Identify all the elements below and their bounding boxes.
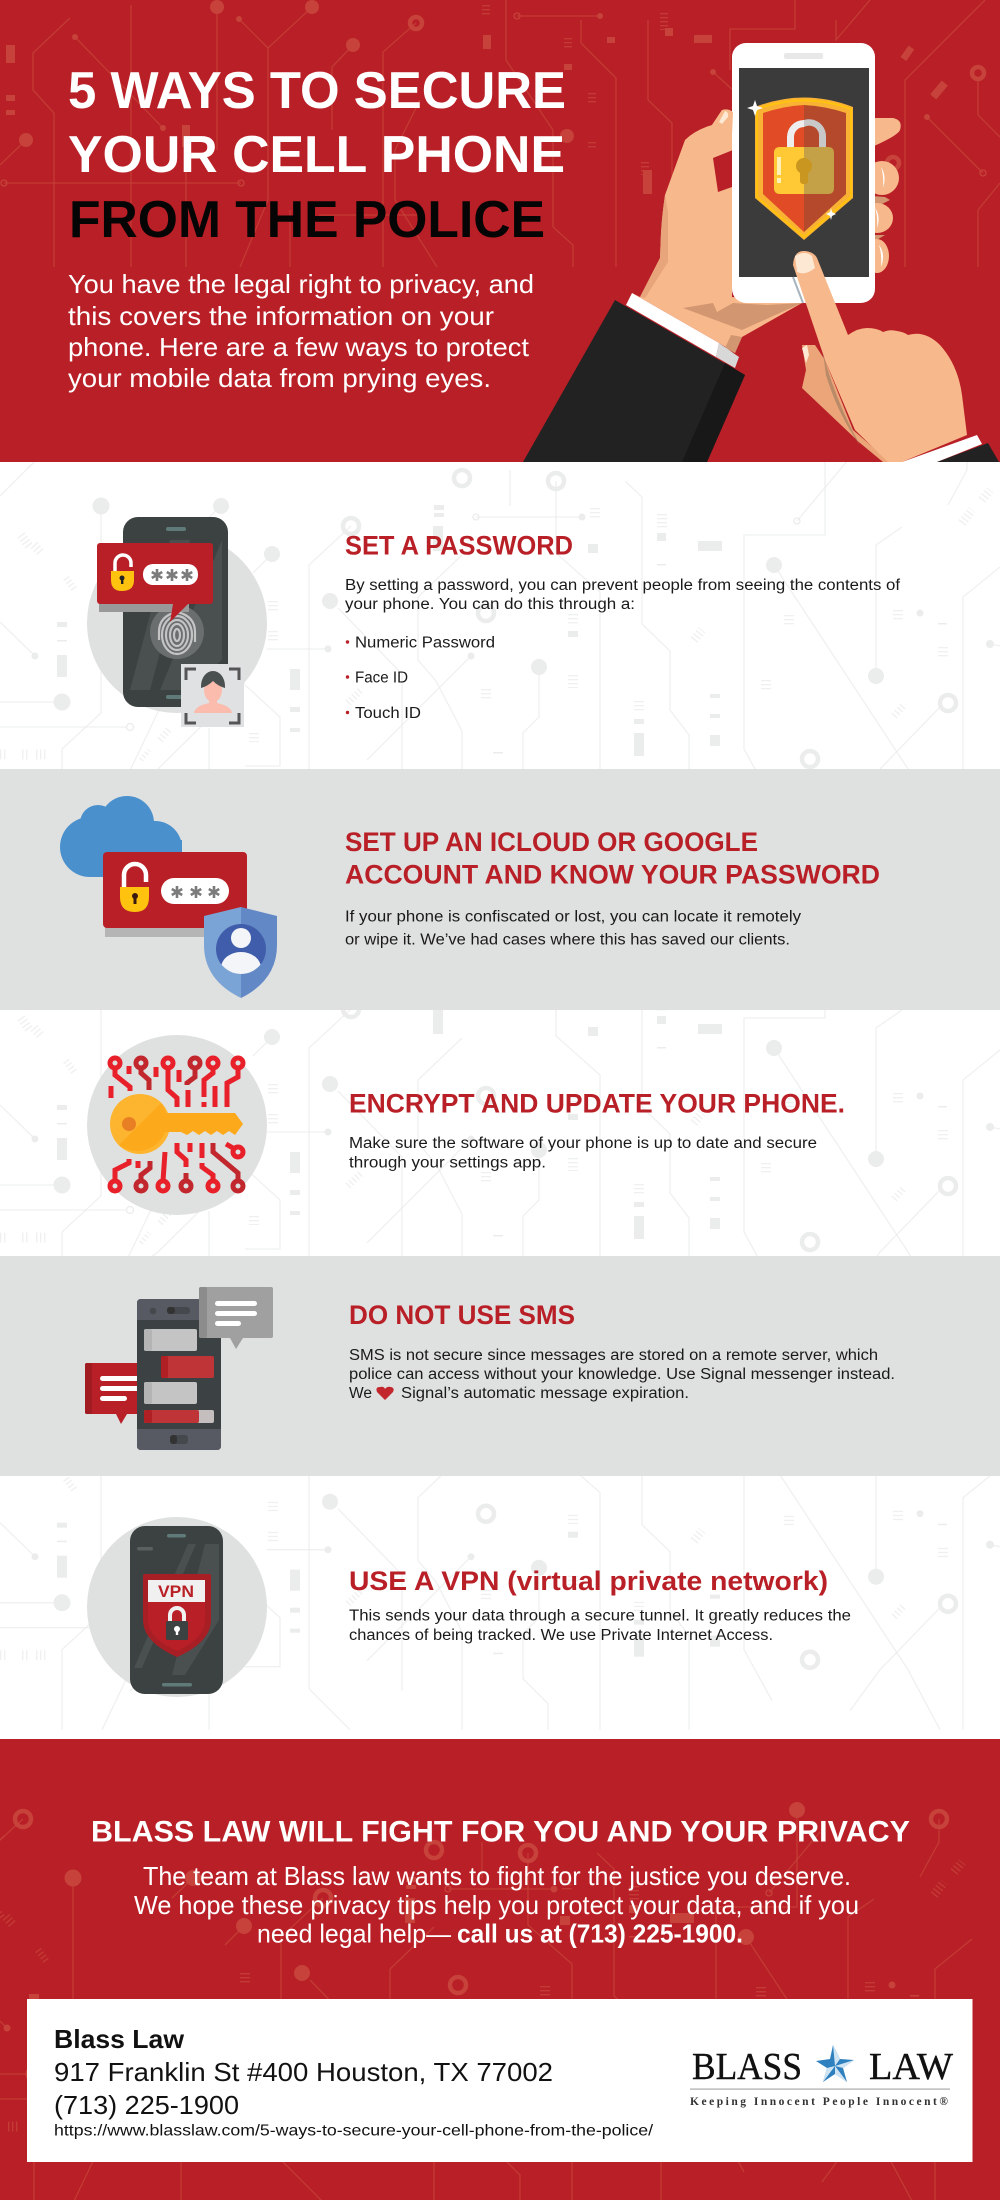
- description: police can access without your knowledge. Use Signal messenger instead.: [349, 1366, 895, 1383]
- contact details: 917 Franklin St #400 Houston, TX 77002: [54, 2057, 553, 2087]
- red bubble: [85, 1363, 145, 1424]
- heading: SET UP AN ICLOUD OR GOOGLE: [345, 827, 758, 857]
- contact details: https://www.blasslaw.com/5-ways-to-secure-your-cell-phone-from-the-police/: [54, 2122, 654, 2140]
- icon: phone with vpn shield: [87, 1517, 267, 1697]
- title: YOUR CELL PHONE: [68, 126, 565, 184]
- heading: SET A PASSWORD: [345, 530, 573, 560]
- intro text: your mobile data from prying eyes.: [68, 363, 491, 393]
- intro text: phone. Here are a few ways to protect: [68, 332, 530, 362]
- description: [349, 1135, 817, 1172]
- heading: USE A VPN (virtual private network): [349, 1566, 828, 1596]
- heading: ACCOUNT AND KNOW YOUR PASSWORD: [345, 860, 880, 890]
- panel: header: [0, 0, 1000, 462]
- circuit pattern: section 1: [0, 462, 1000, 769]
- right cuff and sleeve: [902, 435, 982, 462]
- footer text: The team at Blass law wants to fight for the justice you deserve.: [143, 1861, 851, 1891]
- panel: do not use sms: [0, 1256, 1000, 1476]
- vpn label: VPN: [158, 1582, 194, 1601]
- circuit pattern: section 5: [0, 1476, 1000, 1730]
- circuit pattern: section 3: [0, 1010, 1000, 1256]
- heading: DO NOT USE SMS: [349, 1300, 575, 1330]
- description: your phone. You can do this through a:: [345, 596, 635, 613]
- bullet list: [346, 634, 495, 722]
- icon: heart: [376, 1387, 394, 1400]
- description: This sends your data through a secure tunnel. It greatly reduces the: [349, 1608, 851, 1624]
- password bubble: [97, 543, 213, 622]
- panel: encrypt and update: [0, 1010, 1000, 1256]
- panel: icloud or google account: [0, 769, 1000, 1010]
- description: SMS is not secure since messages are stored on a remote server, which: [349, 1347, 878, 1364]
- heading: [345, 827, 880, 890]
- logo: [690, 2045, 953, 2108]
- description: [345, 577, 901, 613]
- title: FROM THE POLICE: [69, 191, 545, 249]
- title: 5 WAYS TO SECURE: [68, 62, 566, 120]
- footer text: We hope these privacy tips help you protect your data, and if you: [134, 1890, 859, 1920]
- logo: BLASS: [692, 2046, 802, 2088]
- fingers behind phone: [860, 118, 901, 152]
- icon: cloud, password card and shield: [60, 796, 277, 998]
- shield: [747, 98, 853, 240]
- contact details: Blass Law: [54, 2024, 185, 2054]
- description: [349, 1608, 851, 1644]
- icon: hands holding phone with shield: [523, 43, 999, 462]
- contact box: [27, 1999, 972, 2162]
- footer text: [134, 1861, 859, 1948]
- bullet list: Touch ID: [355, 705, 421, 722]
- left cuff: [626, 293, 719, 357]
- description: Signal’s automatic message expiration.: [401, 1385, 689, 1402]
- description: [349, 1347, 895, 1402]
- description: [345, 908, 801, 948]
- icon: phone with password and fingerprint: [87, 517, 267, 727]
- description: We: [349, 1385, 372, 1402]
- footer text: call us at (713) 225-1900.: [457, 1918, 743, 1948]
- description: or wipe it. We’ve had cases where this has saved our clients.: [345, 932, 790, 948]
- title: [68, 62, 566, 249]
- icon: phone with message bubbles: [85, 1287, 273, 1450]
- intro text: this covers the information on your: [68, 301, 494, 331]
- phone: [732, 43, 875, 303]
- intro text: You have the legal right to privacy, and: [68, 269, 534, 299]
- panel: footer call to action: [0, 1739, 1000, 2200]
- fingerprint: [150, 605, 204, 659]
- description: Make sure the software of your phone is up to date and secure: [349, 1135, 817, 1152]
- left sleeve: [523, 300, 745, 462]
- panel: set a password: [0, 462, 1000, 769]
- bullet list: Face ID: [355, 670, 408, 686]
- circuit pattern: footer: [0, 1802, 972, 2200]
- gray bubble: [199, 1287, 273, 1349]
- description: chances of being tracked. We use Private Internet Access.: [349, 1627, 773, 1644]
- right hand pointing: [802, 345, 890, 462]
- logo: Keeping Innocent People Innocent®: [690, 2096, 948, 2108]
- intro text: [68, 269, 534, 393]
- contact details: (713) 225-1900: [54, 2090, 239, 2120]
- description: By setting a password, you can prevent people from seeing the contents of: [345, 577, 901, 594]
- thumb over phone: [712, 110, 733, 158]
- panel: use a vpn: [0, 1476, 1000, 1730]
- face id card: [181, 664, 244, 727]
- description: through your settings app.: [349, 1154, 546, 1172]
- contact details: [54, 2024, 654, 2140]
- phone body: [137, 1299, 221, 1450]
- logo: LAW: [869, 2046, 953, 2088]
- heading: ENCRYPT AND UPDATE YOUR PHONE.: [349, 1088, 845, 1118]
- icon: star: [816, 2045, 854, 2082]
- circuit pattern: header: [0, 0, 1000, 267]
- footer text: need legal help—: [257, 1918, 451, 1948]
- left hand: [632, 109, 802, 353]
- description: If your phone is confiscated or lost, you can locate it remotely: [345, 908, 801, 926]
- bullet list: Numeric Password: [355, 634, 495, 652]
- footer heading: BLASS LAW WILL FIGHT FOR YOU AND YOUR PRIVACY: [91, 1816, 910, 1848]
- icon: key with circuit traces: [87, 1035, 267, 1215]
